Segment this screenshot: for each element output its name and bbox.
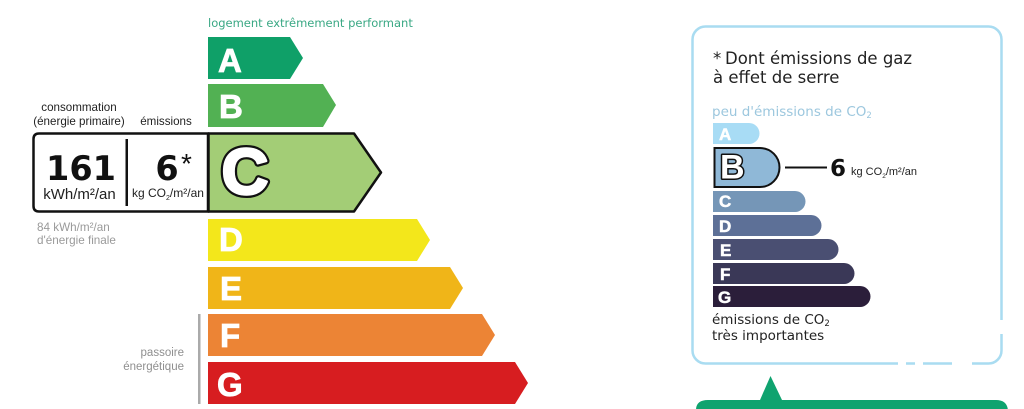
high emissions label: très importantes xyxy=(712,328,824,344)
bar B: B xyxy=(219,88,243,125)
value 6 kg CO2: /m²/an xyxy=(886,166,917,178)
bar A xyxy=(208,37,303,79)
passoire label: passoire xyxy=(141,347,184,359)
small bar C: C xyxy=(719,192,731,211)
small bar E xyxy=(713,239,839,260)
small bar C xyxy=(713,191,806,212)
small bar B highlighted xyxy=(714,148,780,187)
small bar B highlighted: B xyxy=(720,148,745,186)
small bar A xyxy=(713,123,760,144)
small bar G xyxy=(713,286,870,307)
bar B xyxy=(208,84,336,127)
green callout below panel xyxy=(696,376,1008,409)
high emissions label: émissions de CO xyxy=(712,312,824,328)
value 6 kg CO2: 6 xyxy=(830,156,846,182)
small bar D: D xyxy=(719,217,731,236)
panel heading: à effet de serre xyxy=(713,68,839,87)
bar G xyxy=(208,362,528,404)
unit CO2: kg CO xyxy=(132,186,166,200)
pointer line xyxy=(785,166,827,168)
high emissions label: 2 xyxy=(824,319,830,329)
consumption labels: émissions xyxy=(140,115,192,128)
final energy note: d'énergie finale xyxy=(37,234,116,247)
panel heading: * xyxy=(713,49,721,68)
passoire bracket xyxy=(198,314,200,404)
rating box with class C arrow xyxy=(34,134,381,212)
bar G: G xyxy=(217,366,243,403)
panel heading xyxy=(713,49,912,87)
consumption labels xyxy=(33,101,192,128)
small bar D xyxy=(713,215,822,236)
heading: logement extrêmement performant: logement extrêmement performant xyxy=(208,16,413,30)
low emissions label: peu d'émissions de CO xyxy=(712,104,866,120)
bar D xyxy=(208,219,430,261)
consumption labels: consommation xyxy=(41,101,117,114)
low emissions label: 2 xyxy=(866,111,872,121)
bar A: A xyxy=(218,42,242,79)
panel heading: Dont émissions de gaz xyxy=(725,49,912,68)
final energy note xyxy=(37,221,116,247)
value 6 kg CO2 xyxy=(830,156,917,182)
letter C: C xyxy=(222,135,268,208)
high emissions label xyxy=(712,312,830,344)
divider xyxy=(126,139,128,206)
small bar G: G xyxy=(718,288,731,307)
small bar F: F xyxy=(720,265,730,284)
class C arrow xyxy=(208,134,381,212)
small bar F xyxy=(713,263,854,284)
bar D: D xyxy=(219,221,243,258)
value 6: 6 xyxy=(155,149,179,188)
white values box xyxy=(34,134,208,212)
small bar E: E xyxy=(720,241,731,260)
value 6 kg CO2: kg CO xyxy=(851,166,882,178)
bar E xyxy=(208,267,463,309)
value 161: 161 xyxy=(46,149,116,188)
passoire label: énergétique xyxy=(123,361,184,373)
value 6 kg CO2: 2 xyxy=(882,173,886,180)
unit CO2: 2 xyxy=(166,195,170,202)
passoire label xyxy=(123,347,184,373)
panel: greenhouse gas emissions xyxy=(692,26,1004,365)
panel frame xyxy=(692,26,1002,364)
unit CO2: /m²/an xyxy=(170,186,204,200)
letter C: C xyxy=(222,135,268,208)
small bar A: A xyxy=(719,125,731,144)
bar F xyxy=(208,314,495,356)
final energy note: 84 kWh/m²/an xyxy=(37,221,110,234)
bar E: E xyxy=(220,270,242,307)
bar F: F xyxy=(220,317,240,354)
consumption labels: (énergie primaire) xyxy=(33,115,125,128)
unit kWh: kWh/m²/an xyxy=(43,186,116,203)
asterisk: * xyxy=(181,148,192,179)
